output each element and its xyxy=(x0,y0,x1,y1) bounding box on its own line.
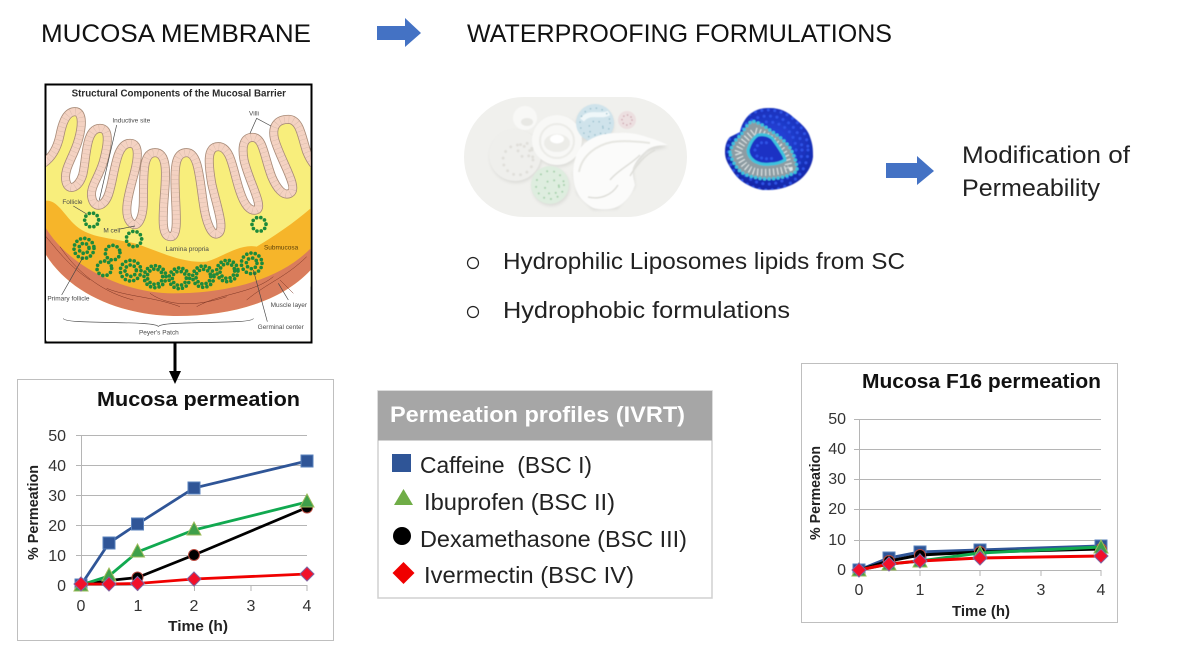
bullet list: formulations: Hydrophilic Liposomes lipids from SC xyxy=(503,248,905,274)
bullet list: formulations xyxy=(468,248,905,323)
panel: mucosal barrier diagram: Primary follicle xyxy=(47,295,90,302)
chart: mucosa permeation: 3 xyxy=(247,598,256,615)
image: cream formulations xyxy=(464,97,687,217)
chart: mucosa permeation: Time (h) xyxy=(168,618,228,635)
arrow: header xyxy=(377,18,421,47)
chart: mucosa permeation: 1 xyxy=(134,598,143,615)
chart: mucosa F16 permeation: 3 xyxy=(1037,582,1046,599)
chart: mucosa permeation: % Permeation xyxy=(25,465,42,560)
bullet list: formulations: Hydrophobic formulations xyxy=(503,297,790,323)
chart: mucosa F16 permeation xyxy=(802,364,1118,622)
arrow: diagram to chart xyxy=(169,342,181,384)
chart: mucosa permeation: 30 xyxy=(48,488,66,505)
chart: mucosa permeation xyxy=(18,380,334,640)
series: ivermectin xyxy=(74,567,314,591)
icon: liposome xyxy=(725,108,813,190)
series: ivermectin F16 xyxy=(852,549,1108,577)
chart: mucosa permeation: 0 xyxy=(57,578,66,595)
panel: mucosal barrier diagram: Submucosa xyxy=(264,244,299,251)
chart: mucosa F16 permeation: 1 xyxy=(916,582,925,599)
panel: mucosal barrier diagram: Follicle xyxy=(62,199,83,206)
chart: mucosa F16 permeation: 30 xyxy=(828,471,846,488)
legend item: ibuprofen: Ibuprofen (BSC II) xyxy=(424,489,615,515)
panel: mucosal barrier diagram: Peyer's Patch xyxy=(139,329,179,336)
heading: waterproofing formulations: WATERPROOFING FORMULATIONS xyxy=(467,20,892,48)
chart: mucosa permeation: 40 xyxy=(48,458,66,475)
series: ibuprofen F16 xyxy=(852,540,1108,576)
chart title: Mucosa F16 permeation xyxy=(862,371,1101,393)
chart: mucosa F16 permeation: 2 xyxy=(976,582,985,599)
panel: mucosal barrier diagram: Villi xyxy=(249,110,259,117)
series: dexamethasone F16 xyxy=(859,544,1106,570)
chart: mucosa F16 permeation: 40 xyxy=(828,441,846,458)
panel: permeation profiles legend xyxy=(378,391,712,598)
chart: mucosa permeation: 20 xyxy=(48,518,66,535)
chart: mucosa permeation: 0 xyxy=(77,598,86,615)
chart: mucosa permeation: 50 xyxy=(48,428,66,445)
chart: mucosa F16 permeation: 50 xyxy=(828,411,846,428)
series: dexamethasone xyxy=(76,502,312,590)
panel: mucosal barrier diagram: M cell xyxy=(103,227,120,234)
panel: mucosal barrier diagram: Inductive site xyxy=(112,117,151,124)
legend item: caffeine: Caffeine (BSC I) xyxy=(420,452,592,478)
chart: mucosa permeation: 4 xyxy=(303,598,312,615)
arrow: to modification xyxy=(886,156,934,185)
chart: mucosa F16 permeation: 20 xyxy=(828,501,846,518)
chart: mucosa F16 permeation: % Permeation xyxy=(807,446,824,540)
panel: mucosal barrier diagram: Muscle layer xyxy=(271,302,308,309)
heading: mucosa membrane: MUCOSA MEMBRANE xyxy=(41,20,311,48)
legend header xyxy=(378,391,712,440)
series: caffeine F16 xyxy=(853,540,1107,576)
text: modification of permeability xyxy=(962,142,1130,202)
text: modification of permeability: Permeability xyxy=(962,175,1100,202)
chart: mucosa F16 permeation: Time (h) xyxy=(952,603,1010,620)
chart: mucosa permeation: 10 xyxy=(48,548,66,565)
series: caffeine xyxy=(75,455,313,591)
panel: mucosal barrier diagram: Lamina propria xyxy=(166,246,209,253)
panel: mucosal barrier diagram: Structural Components of the Mucosal Barrier xyxy=(72,89,286,100)
chart: mucosa F16 permeation: 0 xyxy=(855,582,864,599)
chart: mucosa F16 permeation: 0 xyxy=(837,562,846,579)
chart: mucosa F16 permeation: 4 xyxy=(1097,582,1106,599)
panel: mucosal barrier diagram: Germinal center xyxy=(258,324,305,331)
text: modification of permeability: Modification of xyxy=(962,142,1130,169)
chart: mucosa F16 permeation: 10 xyxy=(828,532,846,549)
chart: mucosa permeation: 2 xyxy=(190,598,199,615)
series: ibuprofen xyxy=(74,494,314,591)
legend item: ivermectin: Ivermectin (BSC IV) xyxy=(424,562,634,588)
legend header: Permeation profiles (IVRT) xyxy=(390,402,685,427)
panel: mucosal barrier diagram xyxy=(33,84,320,342)
chart title: Mucosa permeation xyxy=(97,389,300,411)
legend item: dexamethasone: Dexamethasone (BSC III) xyxy=(420,526,687,552)
